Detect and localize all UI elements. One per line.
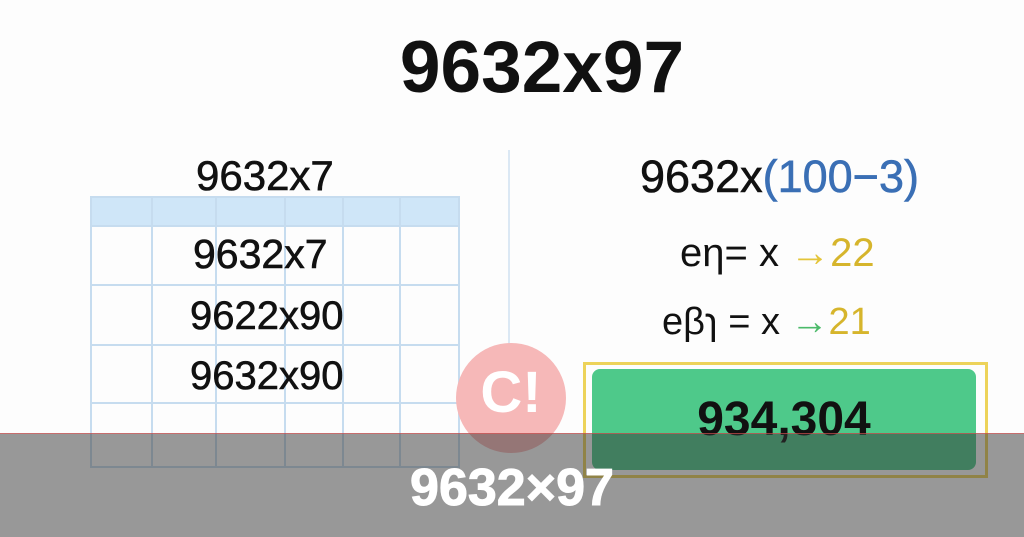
table: 9632x90	[190, 354, 343, 398]
divider	[508, 150, 510, 440]
equation 2: eβɿ = x →21	[662, 301, 871, 343]
logo: C!	[480, 360, 542, 425]
table: 9622x90	[190, 294, 343, 338]
result box	[583, 362, 988, 478]
title: 9632x97	[400, 27, 684, 108]
logo	[456, 343, 566, 453]
result box: 934,304	[697, 393, 871, 446]
caption: 9632×97	[410, 459, 614, 517]
left heading: 9632x7	[196, 152, 334, 199]
equation 1: eη= x →22	[680, 231, 875, 275]
caption band	[0, 433, 1024, 537]
table	[90, 196, 460, 468]
table rows text: 9632x7	[193, 231, 328, 277]
right heading: 9632x(100−3)	[640, 151, 919, 202]
